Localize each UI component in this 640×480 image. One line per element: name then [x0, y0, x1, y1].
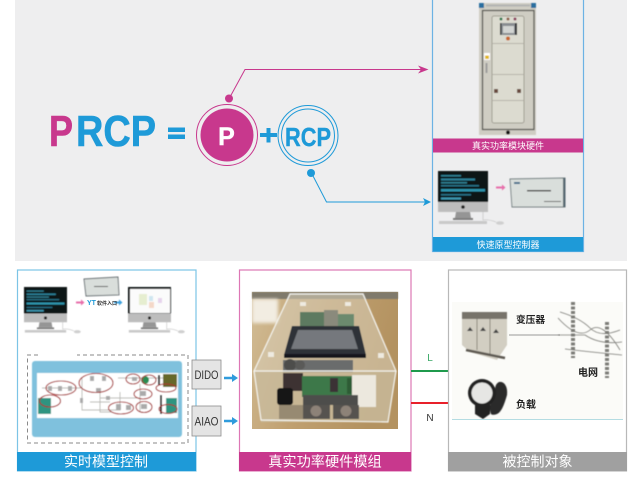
circle: RCP: RCP: [285, 122, 331, 152]
panel: controlled object: [448, 270, 627, 471]
icon: load bulb: [468, 379, 507, 419]
AIAO interface box: AIAO: [194, 414, 218, 428]
panel border: [18, 270, 196, 471]
wire: L line: [411, 353, 448, 372]
DIDO interface box: [192, 360, 221, 389]
heading letters RCP: RCP: [76, 107, 156, 156]
label: transformer: 变压器: [516, 313, 545, 326]
wire: N line: [411, 402, 448, 424]
circle: P: [196, 104, 258, 166]
arrow: RCP to rapid prototyping controller: [307, 169, 431, 206]
dashed frame: [28, 355, 188, 443]
panel: real-time model control: [17, 270, 196, 471]
label bar: rapid prototyping controller: [433, 237, 583, 252]
label bar: power hardware module: 真实功率硬件模组: [268, 454, 382, 470]
label: load: 负载: [516, 398, 536, 411]
label bar: power hardware: 真实功率模块硬件: [472, 140, 544, 151]
label bar: rapid prototyping controller: 快速原型控制器: [476, 239, 540, 250]
heading letter P: P: [49, 107, 73, 156]
photo: acrylic box hardware: [252, 292, 398, 429]
image background: [452, 302, 623, 419]
label bar: power hardware: [433, 138, 583, 152]
panel: top background: [15, 0, 627, 261]
panel: power hardware module: [239, 270, 411, 471]
icon: power cabinet: [479, 3, 536, 135]
plus sign: [260, 128, 277, 142]
panel border: [240, 270, 411, 471]
icon: grid towers: [558, 302, 622, 378]
icon: model flow computers: [24, 277, 185, 333]
label bar: controlled object: [448, 452, 627, 471]
label bar: controlled object: 被控制对象: [502, 454, 572, 470]
label bar: power hardware module: [239, 452, 411, 471]
label: simulation entry: 软件入口: [97, 300, 117, 307]
DIDO interface box: DIDO: [194, 368, 218, 382]
image base line: [452, 418, 623, 420]
arrow: P to power hardware: [225, 66, 428, 102]
wire: L line: L: [427, 353, 433, 364]
icon: computer with controller: [438, 171, 566, 225]
label: simulation entry: [87, 300, 117, 307]
AIAO interface box: [192, 406, 221, 436]
label bar: real-time model control: 实时模型控制: [64, 454, 148, 470]
formula: PRCP equals P plus RCP: [49, 104, 338, 166]
arrow: AIAO to hardware: [224, 417, 238, 425]
wire: N line: N: [426, 413, 434, 424]
circle: RCP: [278, 106, 338, 166]
circle: P: P: [218, 123, 235, 151]
icon: transformer: [462, 312, 507, 360]
panel border: [448, 270, 626, 471]
label: grid: 电网: [578, 366, 598, 379]
panel: top right hardware column: [432, 0, 584, 252]
label: simulation entry: YT: [87, 300, 97, 307]
arrow: DIDO to hardware: [224, 374, 238, 382]
connector: transformer to grid: [509, 334, 560, 336]
equals sign: [168, 128, 185, 139]
label bar: real-time model control: [17, 452, 196, 471]
diagram: simulation model: [32, 361, 182, 437]
panel border: [432, 0, 584, 252]
